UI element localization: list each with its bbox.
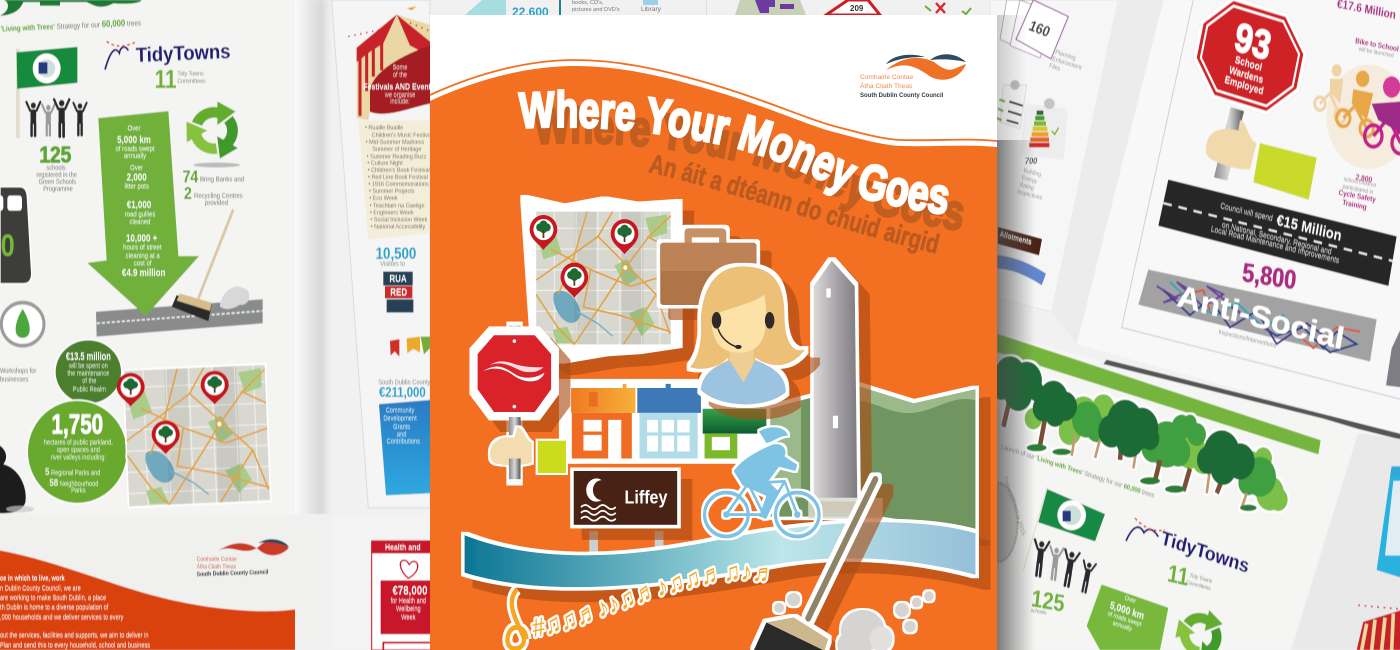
stat: 125 schools: schools [46, 164, 66, 172]
panel: blue box [1377, 466, 1400, 578]
panel: large page [1077, 0, 1400, 435]
logo: South Dublin County Council: Átha Cliath Theas [860, 81, 913, 90]
arrow: street cleaning: road gullies [125, 211, 156, 219]
icon: woman with headset [690, 266, 805, 404]
map [124, 365, 270, 506]
panel: health and wellbeing [372, 541, 432, 650]
panel: festival list: • Teachtain na Gaeilge [370, 202, 425, 209]
circle: 1750 hectares: river valleys including: [51, 454, 106, 462]
band: road spend: €15 Million [1275, 212, 1343, 244]
panel: community grants [379, 400, 430, 495]
trunks [1003, 398, 1225, 493]
panel: community grants: Community [386, 407, 415, 415]
box: roads swept: annually [1112, 620, 1132, 633]
icon: festival tent: Festivals AND Events [363, 82, 435, 92]
purple map [735, 0, 806, 15]
panel: festival list: Children's Music Festival [372, 131, 432, 139]
icon: bin [0, 187, 32, 284]
stat: 11 committees: Tidy Towns [1189, 573, 1213, 585]
panel: lower right page [332, 514, 432, 650]
stat: 2,800 cycle training: 2,800 [1355, 172, 1373, 185]
octagon [473, 330, 555, 417]
stat: 2,800 cycle training: Cycle Safety [1338, 188, 1376, 204]
pole [506, 322, 523, 485]
arrow: street cleaning: of roads swept [116, 145, 155, 153]
icon: festival tent: of the [393, 72, 407, 79]
teal icon [465, 0, 506, 15]
panel: festival list: • 1916 Commemorations [368, 181, 429, 188]
stat: 700 inspections: Inspections [1017, 189, 1043, 202]
arrow: street cleaning: cleaned [129, 218, 151, 226]
panel: community grants: Development [383, 415, 417, 423]
stat: 125 schools: Green Schools [39, 179, 76, 186]
band: anti-social: Anti-Social [1175, 279, 1347, 356]
box: roads swept [1087, 585, 1168, 650]
text: planning files: Enforcement [1052, 56, 1082, 72]
stat: bring banks: 2 [184, 185, 192, 203]
panel: left white page [0, 0, 295, 514]
sign: allotments [997, 226, 1043, 256]
teal mark [643, 0, 658, 5]
icon: refuse bag [0, 446, 34, 513]
panel: second page [332, 0, 430, 508]
panel: community grants: and [397, 431, 407, 439]
arrow: street cleaning: €4.9 million [122, 267, 165, 278]
icon: badge [979, 483, 1018, 562]
panel: community grants: Contributions [387, 438, 420, 446]
stat: 125 schools: schools [1030, 607, 1047, 617]
logo: TidyTowns [105, 39, 231, 70]
sign: 93 school wardens: Wardens [1228, 63, 1264, 85]
page line [706, 0, 707, 15]
logo: TidyTowns: TidyTowns [135, 39, 231, 67]
icon: leaf badge [1, 303, 44, 346]
logo: South Dublin County Council: Comhairle Contae [860, 74, 913, 81]
green band [997, 334, 1321, 454]
panel: health and wellbeing: for Health and [391, 598, 426, 605]
stat: 11 committees [1166, 559, 1213, 593]
arrow: street cleaning: €1,000 [127, 199, 151, 210]
text: intro copy: n Dublin County Council, we are [0, 585, 81, 593]
planning documents [1000, 0, 1068, 59]
cover top shadow [997, 15, 1027, 140]
stat: bring banks: Bring Banks and [200, 176, 244, 184]
arrow: street cleaning: annually [124, 152, 147, 160]
stat: 11 committees: 11 [1166, 559, 1191, 591]
text: bike to school: Bike to School [1355, 37, 1399, 54]
panel: page gutter [295, 0, 332, 514]
stat: 2,800 cycle training [1337, 172, 1377, 213]
right brochure spreads [979, 0, 1400, 650]
text: intro copy: th Dublin is home to a diverse population of [0, 604, 109, 612]
houses [561, 381, 768, 462]
stat: 22,600: 22,600 [512, 5, 549, 19]
arrow: street cleaning [87, 111, 199, 316]
board: Liffey [625, 487, 668, 508]
circle: 1750 hectares [27, 400, 127, 504]
dark trees [992, 356, 1255, 485]
text: books: books, CD's, [572, 0, 604, 6]
red sign [826, 0, 880, 15]
logo: council small: Átha Cliath Theas [197, 563, 236, 571]
stat: bring banks [183, 168, 244, 207]
stat: 11 committees: Tidy Towns [177, 71, 204, 78]
box: roads swept: 5,000 km [1109, 599, 1145, 622]
text: inspections: Inspections/Interventions [1218, 329, 1277, 350]
box: roads swept: of roads swept [1107, 611, 1142, 629]
stat: 125 schools [36, 143, 77, 193]
wave line [430, 60, 997, 141]
stat: 700 inspections [1017, 156, 1046, 202]
icon: cyclists circle [1315, 64, 1400, 169]
stat: 2,800 cycle training: Training [1342, 198, 1367, 212]
circle: 1750 hectares: Parks [71, 487, 86, 495]
text: intro copy: are working to make South Dublin, a place [0, 594, 107, 602]
panel: festival list: • Social Inclusion Week [370, 216, 428, 224]
text: workshops: businesses [0, 376, 28, 384]
cover illustration [461, 194, 990, 650]
stat: 11 committees: Committees [1186, 580, 1211, 592]
sign: 93 school wardens: Employed [1224, 73, 1265, 97]
stat: 2,800 cycle training: school children [1343, 176, 1377, 189]
panel: festival list: • Children's Book Festival [368, 167, 430, 174]
check clipboard [925, 0, 971, 19]
soap bubbles [774, 591, 934, 650]
panel: festival list: • Ruaille Buaille [365, 124, 404, 132]
title shadow: Where Your Money Goes [535, 105, 964, 231]
panel: festival list: • Mid-Summer Madness [366, 138, 424, 146]
circle: public realm spend: will be spent on [68, 363, 108, 370]
road [96, 299, 263, 337]
circle: 1750 hectares: open spaces and [57, 446, 100, 454]
text: planning files: Planning [1055, 50, 1076, 62]
panel: festival list [358, 120, 432, 240]
river [465, 522, 975, 587]
stat: 5,800: 5,800 [1241, 258, 1298, 296]
panel: festival list: • Summer Reading Buzz [367, 153, 426, 161]
dust cloud [220, 286, 249, 309]
text: planning files: Files [1048, 63, 1061, 73]
text: workshops: Workshops for [0, 368, 37, 375]
hills [770, 386, 975, 531]
stat: 2,800 cycle training: participated in [1342, 184, 1374, 196]
stat: 700 inspections: Energy [1021, 175, 1038, 185]
hand and sleeve [490, 427, 566, 479]
text: community development: €211,000 [379, 384, 426, 400]
map pins [117, 371, 229, 454]
panel: festival list: Summer of Heritage [372, 145, 422, 153]
logo: Rua Red: RED [390, 287, 408, 298]
circle: public realm spend: of the [82, 378, 97, 385]
ground patches [1027, 444, 1257, 511]
stat: 700 inspections: 700 [1025, 156, 1038, 166]
planning documents: 160 [1028, 16, 1052, 41]
arrow: street cleaning: hours of street [123, 244, 162, 252]
arrow: street cleaning: 10,000 + [126, 232, 157, 243]
map pins [530, 215, 638, 298]
stat: 11 committees [155, 65, 206, 93]
panel: festival list: • Eco Week [369, 195, 398, 202]
icon: people group [1031, 539, 1096, 594]
band: road spend: on National, Secondary, Regional and [1221, 220, 1332, 257]
icon: festival tent: Some [393, 64, 408, 72]
logo: council small: South Dublin County Council [197, 569, 269, 578]
treble clef [507, 589, 526, 649]
sign: Liffey [574, 471, 677, 556]
icon: pole and hand [1206, 107, 1317, 200]
panel: page edge shadow [1103, 360, 1400, 440]
tower [814, 261, 857, 498]
right page corner object [1386, 323, 1400, 388]
stat: bring banks: Recycling Centres [194, 193, 243, 200]
icon: festival tent: include: [390, 98, 410, 106]
stat: 700 inspections: Rating [1019, 182, 1034, 192]
logo: council small: Comhairle Contae [197, 556, 237, 563]
circle: 1750 hectares: 1,750 [51, 410, 103, 440]
cover white [430, 15, 997, 650]
page inner line [1122, 0, 1400, 400]
icon: bicycle [705, 427, 819, 537]
panel: lower right page [1292, 433, 1400, 650]
text: intro copy: Plan and send this to every household, school and business [0, 642, 150, 650]
panel: festival list: • Engineers Week [370, 209, 414, 217]
icon: clipboard checklist [997, 80, 1027, 129]
treble clef colour [507, 589, 526, 649]
title: Where Your Money Goes [517, 89, 949, 215]
logo: South Dublin County Council: South Dublin County Council [860, 93, 944, 99]
stat: 10,500 visitors: 10,500 [376, 246, 416, 263]
text: community development: South Dublin County [378, 379, 431, 387]
gutter shade [1052, 0, 1163, 344]
trees row [992, 356, 1288, 511]
arrow: street cleaning: Over [127, 125, 141, 133]
panel: community grants: Grants [393, 424, 410, 431]
top strip fragments above cover [465, 0, 971, 19]
tower base [808, 498, 883, 519]
logo: TidyTowns: TidyTowns [1159, 527, 1251, 577]
icon: people group [26, 99, 87, 137]
stat: 11 committees: Committees [177, 78, 206, 85]
panel: top left page [990, 0, 1118, 312]
icon: festival tent [1357, 605, 1400, 650]
logo: TidyTowns [1126, 518, 1251, 577]
stat: 700 inspections: Building [1023, 168, 1041, 179]
cover panel [430, 15, 998, 650]
cover orange wave [430, 66, 997, 650]
text: intro copy: ce in which to live, work [0, 575, 65, 583]
bunting [390, 337, 430, 357]
stat: bring banks: 74 [183, 168, 198, 187]
panel: festival list: • Culture Night [367, 159, 403, 167]
box: roads swept: Over [1124, 595, 1137, 605]
stat: 125 schools: 125 [39, 143, 72, 168]
text: intro copy: ,000 households and we deliver services to every [0, 614, 124, 622]
circle: 1750 hectares: hectares of public parkland, [44, 439, 113, 447]
pole inner [509, 326, 521, 481]
band: road spend: Local Road Maintenance and Improvements [1210, 224, 1340, 265]
blue arc [997, 255, 1046, 285]
band: road spend [1158, 179, 1397, 286]
circle: public realm spend: Public Realm [73, 386, 106, 394]
trees strip top [0, 0, 142, 16]
icon: briefcase [660, 228, 757, 305]
panel: festival list: • Summer Projects [369, 188, 414, 195]
text: intro copy: out the services, facilities and supports, we aim to deliver in [0, 632, 149, 640]
sign: 93 school wardens: 93 [1231, 14, 1275, 69]
shadow under recycle [193, 162, 240, 167]
arrow: street cleaning: cost of [134, 260, 152, 268]
pole lower [509, 417, 521, 479]
stat: 125 schools: Programme [43, 186, 73, 193]
arrow: street cleaning: cleaning at a [126, 252, 160, 260]
sign: stop sign [473, 322, 566, 485]
panel: health and wellbeing: €78,000 [393, 585, 427, 598]
logo: Rua Red [383, 272, 413, 313]
sign: 93 school wardens: School [1234, 53, 1263, 73]
logo: Rua Red: RUA [389, 273, 407, 284]
logo: South Dublin County Council [860, 54, 966, 99]
panel: health and wellbeing: Wellbeing [396, 606, 421, 613]
circle: public realm spend: €13.5 million [66, 351, 111, 363]
text: bike to school: will be launched [1357, 46, 1394, 60]
panel: festival list: • National Accessibility [371, 223, 426, 231]
icon: green flag [16, 47, 77, 138]
icon: festival tent [348, 6, 435, 120]
mid trees [1072, 401, 1276, 497]
divider line [559, 0, 561, 15]
panel: orange-red intro [0, 551, 295, 650]
heading: living with trees: 'Living with Trees' Strategy for our 60,000 trees [0, 17, 142, 34]
icon: energy rating clipboard [1021, 98, 1068, 160]
arrow: street cleaning: Over [130, 164, 144, 172]
icon: green flag [1023, 487, 1105, 570]
text: living with trees launch: Launch of our 'Living with Trees' Strategy for our 60,000 trees [1000, 443, 1155, 500]
icon: broom [754, 479, 875, 650]
text: rotated note: Trees planted in 2015 [1002, 475, 1026, 537]
cover drop shadow [997, 140, 1035, 650]
text: books: pictures and DVD's [572, 7, 620, 13]
posts [589, 531, 663, 556]
light trees [1025, 394, 1288, 511]
circle: 1750 hectares: 58 Neighbourhood [49, 477, 99, 488]
text: library: Library [641, 6, 662, 13]
sign: allotments: Allotments [999, 230, 1032, 247]
stat: 125 schools: 125 [1030, 584, 1066, 617]
panel: green header page [990, 332, 1400, 650]
purple blocks [755, 0, 794, 13]
band: anti-social [1138, 269, 1377, 361]
icon: bin: 0 [1, 229, 15, 264]
panel: festival list: • Red Line Book Festival [368, 174, 428, 181]
icon: recycling [1163, 599, 1235, 650]
sign: 93 school wardens [1186, 0, 1314, 124]
icon: festival tent: we organise [384, 91, 416, 99]
panel: health and wellbeing: Health and [385, 542, 421, 552]
icon: recycling [178, 101, 248, 164]
left brochure spreads [0, 0, 435, 650]
circle: 1750 hectares: 5 Regional Parks and [45, 466, 101, 477]
arrow: street cleaning: 2,000 [127, 172, 147, 183]
logo: council small [197, 539, 289, 578]
stat: 125 schools: registered in the [36, 171, 77, 179]
arrow: street cleaning: 5,000 km [117, 134, 151, 145]
stat: 11 committees: 11 [155, 65, 177, 93]
arrow: street cleaning: litter pots [125, 183, 149, 191]
circle: public realm spend: the maintenance [67, 370, 110, 378]
panel: lower page [0, 516, 328, 650]
stat: 10,500 visitors: Visitors to [380, 261, 405, 268]
panel: health and wellbeing: Week [401, 614, 416, 622]
icon: music notes [502, 563, 770, 650]
band: road spend: Council will spend [1220, 201, 1273, 223]
subtitle: An áit a dtéann do chuid airgid [648, 154, 940, 254]
map [524, 198, 679, 360]
red sign: 209 [850, 4, 864, 13]
icon: broom [172, 209, 233, 321]
circle: public realm spend [55, 340, 122, 404]
stat: bring banks: provided [205, 200, 228, 207]
text: intro copy [0, 575, 150, 650]
notes: #♫♫♬♪♪♫♬♪♫♫♬♫♪♬ [530, 563, 770, 640]
